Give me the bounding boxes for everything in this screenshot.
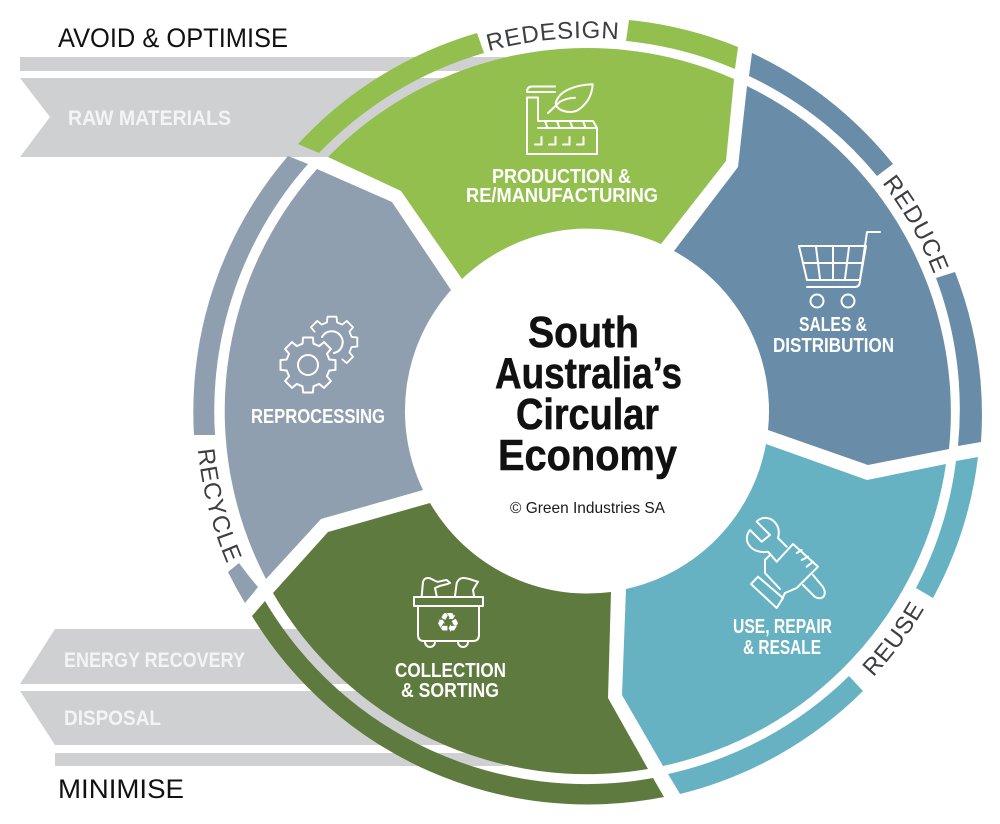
panel: collection and sorting: [273, 503, 648, 774]
label: production: PRODUCTION &: [492, 166, 631, 188]
heading: avoid and optimise: AVOID & OPTIMISE: [58, 23, 288, 53]
arrow band: disposal: [20, 691, 450, 745]
ring label: reduce: REDUCE: [883, 174, 949, 274]
icon: shopping cart: [799, 232, 880, 308]
label: use, repair: USE, REPAIR: [733, 616, 832, 638]
title: South: [528, 308, 639, 357]
icon: recycling symbol: ♻: [436, 608, 460, 639]
panel: reprocessing: [225, 169, 451, 579]
outer ring: reduce: [749, 53, 982, 446]
panel: sales and distribution: [674, 86, 951, 465]
ring label: redesign: REDESIGN: [486, 21, 618, 51]
label: sorting: & SORTING: [401, 680, 499, 702]
title: Australia’s: [495, 349, 682, 398]
label: reprocessing: REPROCESSING: [251, 406, 385, 428]
label: raw materials: RAW MATERIALS: [68, 107, 231, 130]
label: resale: & RESALE: [743, 637, 821, 659]
ring label: recycle: RECYCLE: [198, 449, 242, 563]
icon: recycling bin: [414, 578, 483, 647]
outer ring: recycle: [193, 156, 308, 603]
icon: hand holding wrench: [747, 518, 825, 608]
label: disposal: DISPOSAL: [64, 707, 161, 730]
panel: production and re/manufacturing: [328, 48, 734, 279]
band: minimise strip: [55, 753, 505, 766]
ring label: reuse: REUSE: [862, 601, 924, 676]
heading: minimise: MINIMISE: [58, 774, 184, 804]
arrow band: energy recovery: [20, 629, 400, 684]
outer ring: dark green collection arc: [252, 601, 664, 804]
band: avoid and optimise strip: [20, 57, 520, 71]
outer ring: reuse: [668, 457, 978, 794]
label: distribution: DISTRIBUTION: [773, 335, 894, 357]
copyright credit: © Green Industries SA: [510, 500, 665, 517]
outer ring: redesign: [298, 20, 738, 153]
label: sales: SALES &: [799, 314, 867, 336]
icon: gears: [280, 317, 357, 392]
icon: factory with leaf: [527, 84, 597, 154]
panel: use, repair and resale: [622, 444, 946, 766]
label: collection: COLLECTION: [395, 660, 506, 682]
title: Circular: [516, 390, 659, 439]
title: Economy: [498, 431, 677, 480]
label: re/manufacturing: RE/MANUFACTURING: [466, 185, 658, 207]
label: energy recovery: ENERGY RECOVERY: [64, 649, 245, 672]
arrow band: raw materials: [20, 78, 530, 157]
title: [495, 308, 682, 480]
